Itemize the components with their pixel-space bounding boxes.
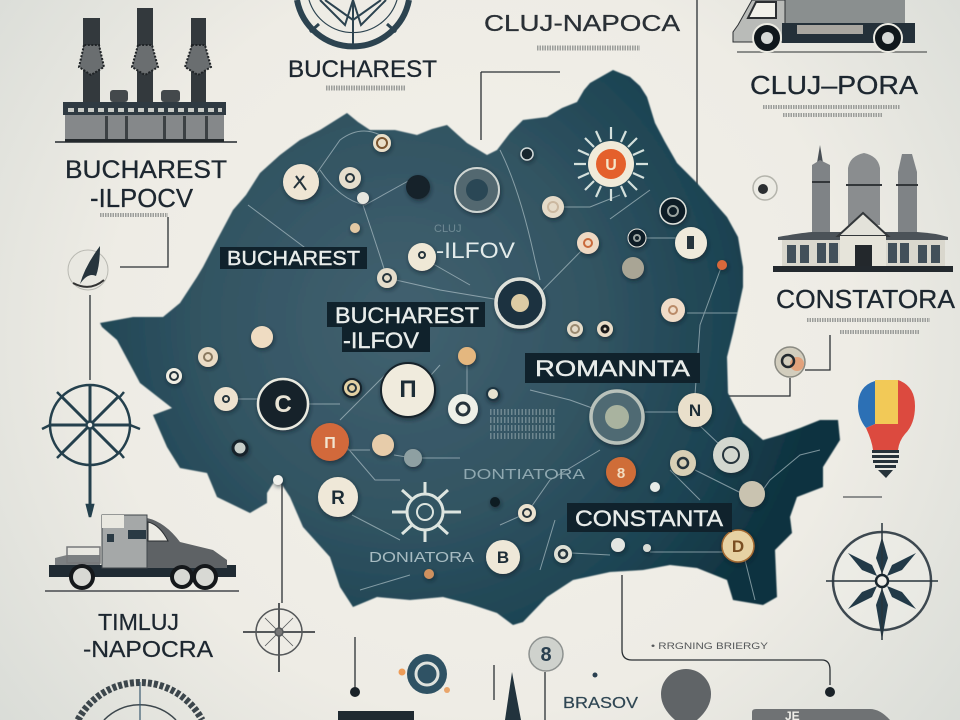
compass icon, top — [297, 0, 409, 46]
heading: Bucharest-Ilfov: BUCHAREST — [65, 156, 227, 184]
heading: Timluj Napocra: -NAPOCRA — [83, 636, 214, 662]
map labels — [220, 223, 732, 566]
building icon, right — [773, 145, 953, 272]
map labels: -ILFOV — [343, 328, 419, 353]
spike — [505, 672, 521, 720]
bottom black bar — [338, 711, 414, 720]
dot pattern — [490, 412, 555, 436]
map labels: CONSTANTA — [575, 506, 723, 531]
map labels: BUCHAREST — [335, 303, 479, 328]
bottom round icon — [398, 654, 450, 694]
node letters: B — [497, 548, 509, 567]
heading: Timluj Napocra — [83, 609, 214, 662]
nodes — [166, 134, 765, 579]
map labels: ROMANNTA — [535, 356, 690, 381]
node letters — [274, 376, 744, 567]
pin, left — [68, 246, 108, 290]
heading: Bucharest-Ilfov: -ILPOCV — [90, 183, 194, 213]
small tick, right — [843, 496, 882, 498]
node letters: C — [274, 391, 292, 418]
node letters: 8 — [617, 465, 625, 482]
map labels: -ILFOV — [436, 238, 515, 263]
network lines — [232, 131, 820, 600]
map labels: DONIATORA — [369, 549, 474, 566]
node letters: D — [732, 537, 744, 556]
car, lower left — [45, 515, 239, 592]
icon: lightbulb in Romanian flag colours — [858, 380, 915, 478]
van, bottom right — [752, 709, 890, 720]
node — [529, 637, 563, 671]
small node, right — [753, 176, 777, 200]
map labels: BUCHAREST — [227, 248, 360, 270]
ship wheel, left — [42, 385, 140, 517]
orange sunburst icon — [574, 127, 648, 201]
compass target, bottom — [243, 603, 315, 672]
heading: Bucharest top: BUCHAREST — [288, 56, 437, 83]
heading: Timluj Napocra: TIMLUJ — [98, 609, 179, 635]
node inner marks — [170, 138, 739, 558]
balloon — [661, 669, 711, 720]
dial, bottom-left — [78, 682, 202, 720]
factory icon, top-left — [55, 8, 237, 143]
small dot above Brasov — [592, 672, 598, 678]
compass rose, right — [826, 523, 938, 640]
heading: Constatora: CONSTATORA — [776, 284, 956, 314]
heading: Bucharest-Ilfov — [65, 156, 227, 213]
pin dot — [350, 687, 360, 697]
connector lines — [90, 0, 830, 720]
end dot — [825, 687, 835, 697]
gear icon — [392, 482, 461, 542]
heading: Cluj-Napoca: CLUJ-NAPOCA — [484, 10, 681, 36]
node letters: N — [689, 401, 701, 420]
node: 8 — [540, 644, 552, 666]
label: Brasov: BRASOV — [563, 695, 638, 712]
node letters: П — [324, 435, 336, 452]
map labels: DONTIATORA — [463, 466, 585, 483]
small caption: • RRGNING BRIERGY — [651, 641, 768, 651]
node at right connector — [775, 347, 805, 377]
truck icon, top-right — [733, 0, 927, 53]
caption lines — [100, 48, 930, 332]
orange sunburst icon: U — [605, 157, 617, 174]
heading: Cluj-Pora: CLUJ–PORA — [750, 70, 919, 100]
map labels: CLUJ — [434, 223, 462, 235]
node letters: R — [331, 488, 345, 509]
node letters: П — [399, 376, 417, 403]
